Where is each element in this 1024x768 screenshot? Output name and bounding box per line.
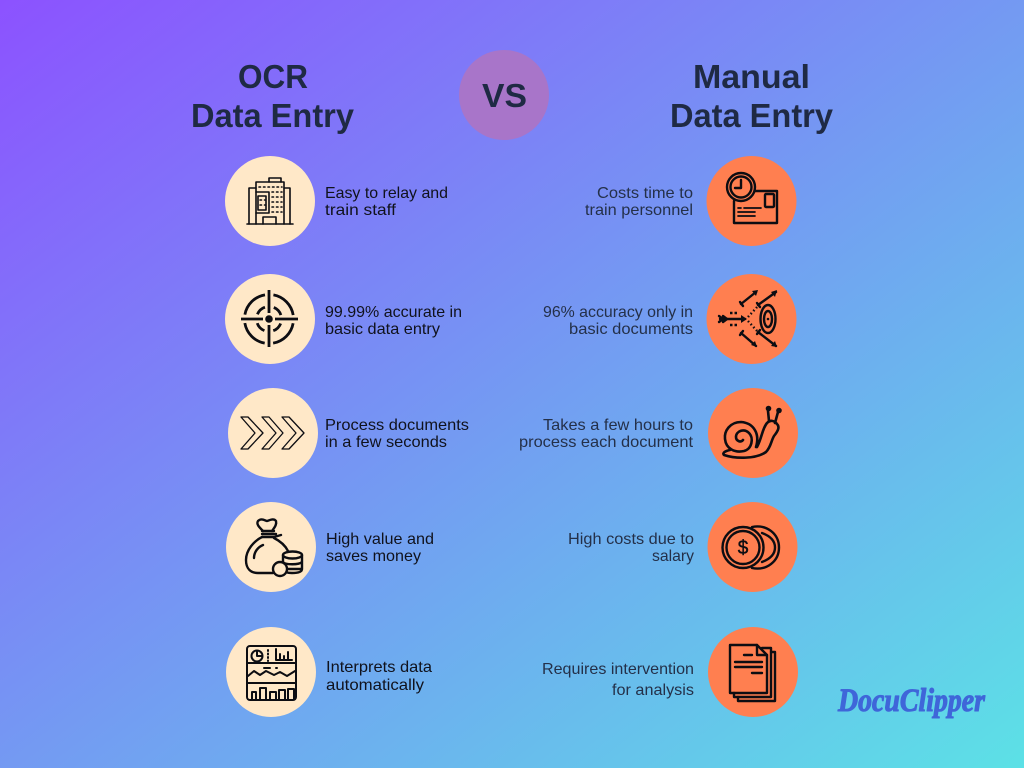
icon: data dashboard	[247, 646, 296, 700]
text: 96% accuracy only in	[543, 304, 693, 321]
Manual row 5: manual analysis	[542, 627, 798, 717]
text	[325, 417, 469, 451]
text	[326, 659, 432, 694]
text: train staff	[325, 202, 397, 219]
text: train personnel	[585, 202, 693, 219]
text: process each document	[519, 434, 694, 451]
text	[325, 304, 462, 338]
icon: money bag and coins	[246, 519, 302, 576]
text	[519, 417, 694, 451]
Manual row 2: accuracy	[543, 274, 796, 364]
text: automatically	[326, 677, 424, 694]
OCR row 4: value	[226, 502, 434, 592]
OCR row 5: analysis	[226, 627, 432, 717]
icon: dollar coins: $	[738, 538, 749, 559]
icon: clock and card	[727, 173, 777, 223]
text: in a few seconds	[325, 434, 447, 451]
text: Requires intervention	[542, 661, 694, 678]
text: basic documents	[569, 321, 693, 338]
text	[543, 304, 693, 338]
icon: dollar coins	[722, 526, 779, 569]
badge: VS	[459, 50, 549, 140]
icon: chevrons	[241, 417, 304, 449]
logo: DocuClipper: DocuClipper	[837, 683, 986, 719]
text: Easy to relay and	[325, 185, 448, 202]
heading: OCR Data Entry: OCR	[238, 58, 308, 95]
text: for analysis	[612, 682, 694, 699]
OCR row 2: accuracy	[225, 274, 462, 364]
Manual row 1: training time	[585, 156, 796, 246]
text	[326, 531, 434, 565]
text: High costs due to	[568, 531, 694, 548]
Manual row 4: salary costs	[568, 502, 798, 592]
icon: target crosshair	[241, 290, 298, 347]
icon: office building	[247, 178, 293, 224]
text	[568, 531, 694, 565]
heading: Manual Data Entry	[670, 58, 834, 134]
text: 99.99% accurate in	[325, 304, 462, 321]
text: Costs time to	[597, 185, 693, 202]
heading: OCR Data Entry: Data Entry	[191, 97, 355, 134]
text: Takes a few hours to	[543, 417, 693, 434]
text: Process documents	[325, 417, 469, 434]
text	[585, 185, 693, 219]
text: salary	[652, 548, 694, 565]
icon: snail	[723, 406, 782, 458]
text	[325, 185, 448, 219]
heading: OCR Data Entry	[191, 58, 355, 134]
OCR row 1: staff training	[225, 156, 448, 246]
icon: arrows missing target	[719, 290, 777, 347]
OCR row 3: speed	[228, 388, 469, 478]
heading: Manual Data Entry: Data Entry	[670, 97, 834, 134]
Manual row 3: slow processing	[519, 388, 798, 478]
text: Interprets data	[326, 659, 432, 676]
icon: stacked documents	[730, 645, 775, 701]
text: saves money	[326, 548, 421, 565]
text	[542, 661, 694, 699]
text: basic data entry	[325, 321, 440, 338]
heading: Manual Data Entry: Manual	[693, 58, 810, 95]
badge: VS: VS	[482, 77, 527, 114]
text: High value and	[326, 531, 434, 548]
